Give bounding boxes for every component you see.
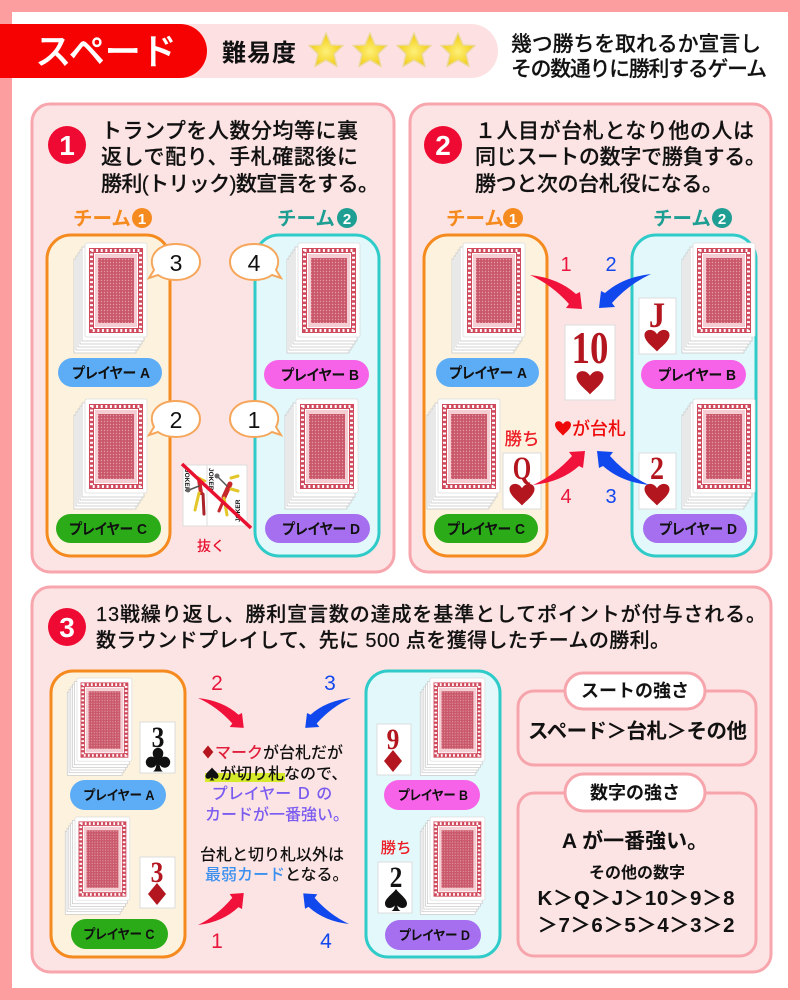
- game summary text: その数通りに勝利するゲーム: [511, 58, 767, 81]
- player C label: [56, 514, 161, 543]
- panel: step 2: [410, 104, 771, 572]
- icon: difficulty stars: [309, 33, 475, 66]
- trump explanation text: プレイヤー Ｄ の: [212, 785, 332, 803]
- trump explanation text: [200, 743, 349, 884]
- title: スペード: [35, 31, 177, 72]
- card: 10 of hearts: [565, 323, 615, 400]
- team 2 heading: 2: [343, 211, 351, 228]
- step number 3: [48, 608, 86, 646]
- play order numbers: 3: [324, 672, 336, 695]
- player C label: [71, 919, 168, 949]
- step 1 text: [101, 120, 379, 196]
- step 1 text: トランプを人数分均等に裏: [101, 120, 358, 143]
- arrow 1: [530, 275, 582, 309]
- play order numbers: 3: [605, 486, 617, 508]
- trump explanation text: 台札と切り札以外は: [200, 846, 344, 864]
- card deck B: [287, 243, 360, 353]
- card: J of hearts: [639, 295, 676, 354]
- team 1 heading: チーム: [446, 208, 504, 230]
- card deck A: [67, 678, 132, 775]
- play order numbers: 1: [560, 254, 572, 276]
- card: 9 of diamonds: 9: [387, 723, 399, 757]
- team 2 box: [632, 235, 756, 556]
- arrow 2: [198, 698, 244, 728]
- box: suit strength: [518, 673, 756, 765]
- team 2 heading: チーム: [277, 208, 335, 230]
- card: 3 of diamonds: [140, 856, 175, 908]
- play order numbers: [560, 254, 617, 508]
- player A label: [58, 358, 162, 387]
- team 2 heading: 2: [718, 211, 726, 228]
- card deck D: [420, 817, 485, 914]
- play order numbers: 1: [211, 930, 223, 953]
- arrow 3: [597, 451, 649, 485]
- bubble: bid 2: [149, 401, 200, 437]
- bubble: bid 3: 3: [170, 250, 182, 276]
- removed joker cards: JOKER: [183, 469, 190, 492]
- removed joker cards: JOKER: [207, 468, 214, 491]
- player B label: プレイヤー B: [658, 367, 736, 384]
- heading pill: 数字の強さ: [590, 783, 680, 803]
- player C label: プレイヤー C: [69, 521, 147, 538]
- player B label: [384, 780, 480, 810]
- player A label: プレイヤー A: [84, 788, 155, 803]
- player C label: プレイヤー C: [447, 521, 525, 538]
- heading pill: スートの強さ: [581, 681, 689, 701]
- team 2 box: [366, 671, 500, 957]
- player B label: プレイヤー B: [398, 788, 468, 803]
- step 2 text: １人目が台札となり他の人は: [475, 120, 754, 143]
- card: 10 of hearts: 10: [572, 323, 608, 373]
- step 3 text: [96, 603, 766, 652]
- step number 2: [424, 126, 462, 164]
- step 2 text: [475, 120, 766, 196]
- removed joker cards: [182, 464, 251, 528]
- bubble: bid 1: [230, 401, 281, 437]
- card: 3 of diamonds: 3: [151, 856, 163, 890]
- player D label: プレイヤー D: [282, 521, 360, 538]
- arrow 4: [533, 451, 585, 485]
- play order numbers: 2: [605, 254, 617, 276]
- step number 1: 1: [59, 130, 75, 161]
- bubble: bid 4: 4: [248, 250, 261, 276]
- player D label: プレイヤー D: [399, 928, 470, 943]
- arrow 4: [303, 893, 349, 924]
- player A label: プレイヤー A: [449, 365, 527, 382]
- bubble: bid 4: [230, 244, 281, 280]
- arrow 1: [198, 893, 244, 925]
- heading pill: [565, 673, 705, 709]
- player D label: [643, 514, 747, 543]
- arrow 3: [305, 698, 351, 728]
- heading pill: [565, 774, 705, 811]
- step 1 text: 返しで配り、手札確認後に: [101, 146, 358, 169]
- player B label: [264, 360, 369, 389]
- number order text: その他の数字: [589, 864, 685, 882]
- win label: 勝ち: [380, 839, 412, 857]
- panel: step 1: [32, 104, 394, 572]
- player B label: プレイヤー B: [281, 367, 359, 384]
- card deck C: [65, 817, 130, 914]
- step 3 text: 数ラウンドプレイして、先に 500 点を獲得したチームの勝利。: [96, 629, 670, 652]
- removed joker cards: JOKER: [235, 499, 242, 522]
- number order text: K＞Q＞J＞10＞9＞8: [538, 887, 734, 910]
- card: 9 of diamonds: [377, 723, 411, 775]
- player B label: [641, 360, 746, 389]
- number order text: ＞7＞6＞5＞4＞3＞2: [538, 914, 734, 937]
- card: 2 of spades: 2: [390, 861, 402, 895]
- difficulty label: 難易度: [222, 40, 296, 67]
- card deck B: [420, 678, 485, 775]
- card deck A: [74, 243, 147, 353]
- play order numbers: 4: [560, 486, 572, 508]
- card: Q of hearts: Q: [513, 450, 531, 487]
- card: 2 of spades: [378, 861, 412, 913]
- play order numbers: [211, 672, 336, 953]
- red cross-out line: [182, 464, 251, 528]
- label: remove: 抜く: [197, 538, 225, 554]
- win label: 勝ち: [504, 429, 540, 449]
- lead suit label: が台札: [572, 418, 626, 439]
- trump explanation text: が切り札なので、: [220, 764, 347, 783]
- game summary text: [511, 33, 767, 81]
- step 1 text: 勝利(トリック)数宣言をする。: [101, 173, 379, 196]
- player D label: プレイヤー D: [659, 521, 737, 538]
- panel: step 3: [32, 587, 771, 972]
- player A label: プレイヤー A: [72, 365, 150, 382]
- play order numbers: 2: [211, 672, 223, 695]
- player A label: [70, 780, 166, 810]
- player D label: [385, 920, 481, 950]
- player A label: [436, 358, 539, 387]
- step 2 text: 同じスートの数字で勝負する。: [475, 146, 766, 169]
- team 1 box: [51, 671, 185, 957]
- team 1 heading: 1: [138, 211, 146, 228]
- card deck D: [682, 399, 755, 509]
- team 2 box: [255, 235, 379, 556]
- team 1 heading: チーム: [73, 208, 131, 230]
- step number 2: 2: [435, 130, 451, 161]
- suit order text: スペード＞台札＞その他: [528, 720, 747, 743]
- card: Q of hearts: [503, 450, 541, 509]
- trump explanation text: カードが一番強い。: [205, 805, 349, 824]
- card deck C: [74, 399, 147, 509]
- trump explanation text: 最弱カードとなる。: [205, 866, 349, 884]
- bubble: bid 3: [149, 244, 200, 280]
- header: title and difficulty: [0, 24, 498, 78]
- card deck D: [285, 399, 358, 509]
- play order numbers: 4: [320, 930, 332, 953]
- bubble: bid 1: 1: [248, 407, 260, 433]
- player D label: [265, 514, 370, 543]
- ace note: A が一番強い。: [562, 829, 708, 853]
- card: 2 of hearts: [639, 450, 676, 509]
- team 1 box: [424, 235, 547, 556]
- player C label: [434, 514, 538, 543]
- player C label: プレイヤー C: [84, 927, 155, 942]
- card: J of hearts: J: [649, 295, 665, 335]
- card deck C: [427, 399, 500, 509]
- step number 3: 3: [59, 612, 75, 643]
- bubble: bid 2: 2: [170, 407, 182, 433]
- card deck A: [452, 243, 525, 353]
- team 2 heading: チーム: [653, 208, 711, 230]
- arrow 2: [599, 274, 651, 308]
- team 1 heading: 1: [509, 211, 517, 228]
- step number 1: [48, 126, 86, 164]
- team 1 box: [47, 235, 170, 556]
- step 2 text: 勝つと次の台札役になる。: [475, 173, 723, 196]
- trump explanation text: マークが台札だが: [215, 743, 343, 762]
- game summary text: 幾つ勝ちを取れるか宣言し: [511, 33, 761, 56]
- card: 3 of clubs: [140, 721, 175, 773]
- number order text: [538, 864, 734, 937]
- card: 2 of hearts: 2: [650, 450, 664, 487]
- card deck B: [682, 243, 755, 353]
- box: number strength: [518, 774, 756, 956]
- step 3 text: 13戦繰り返し、勝利宣言数の達成を基準としてポイントが付与される。: [96, 603, 766, 626]
- card: 3 of clubs: 3: [152, 721, 164, 755]
